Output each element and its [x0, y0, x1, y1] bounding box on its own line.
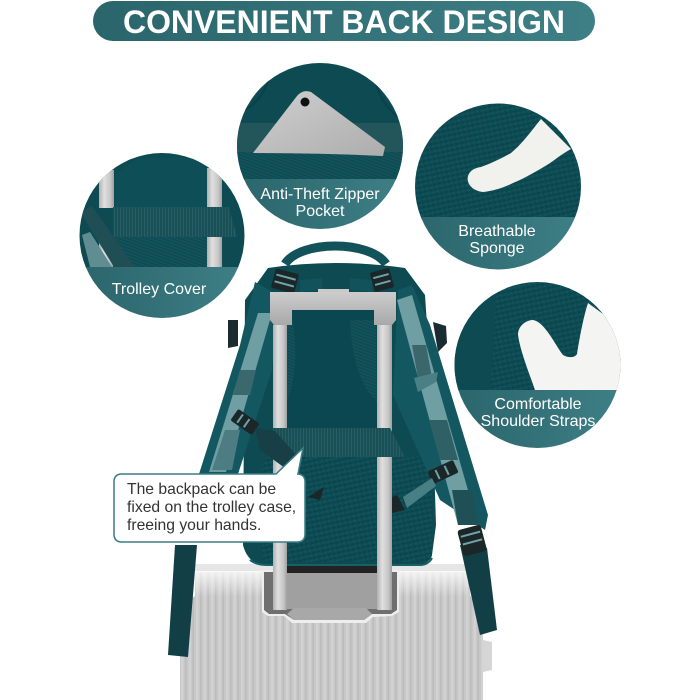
- callout: [114, 448, 305, 542]
- backpack: [168, 246, 497, 657]
- strap to side clip: [403, 478, 436, 508]
- callout: The backpack can be: [127, 481, 276, 498]
- label: trolley cover: Trolley Cover: [112, 281, 207, 298]
- callout: fixed on the trolley case,: [127, 499, 296, 516]
- lower left strap: [168, 545, 197, 657]
- panel: trolley cover: [79, 152, 245, 319]
- label: breathable sponge: Breathable: [458, 223, 536, 240]
- trolley strap: [255, 428, 405, 468]
- panel: breathable sponge: [414, 103, 582, 271]
- buckles: [230, 268, 487, 557]
- right shoulder strap: [393, 285, 488, 530]
- label: comfortable shoulder straps: Comfortable: [494, 396, 582, 413]
- label: anti-theft zipper pocket: [260, 188, 380, 216]
- telescopic trolley handle: [270, 289, 396, 610]
- label: anti-theft zipper pocket: Anti-Theft Zipper: [260, 186, 380, 203]
- top carry handle: [285, 246, 386, 264]
- panel: comfortable shoulder straps: [454, 281, 625, 450]
- label: comfortable shoulder straps: [481, 396, 595, 430]
- label: anti-theft zipper pocket: Pocket: [296, 203, 345, 220]
- panel: anti-theft zipper pocket: [236, 62, 404, 230]
- backpack body: [243, 263, 436, 566]
- callout: freeing your hands.: [127, 517, 261, 534]
- padding cross-section: [518, 303, 625, 390]
- icon: tablet in pocket: [253, 91, 385, 156]
- title banner: CONVENIENT BACK DESIGN: [123, 4, 565, 40]
- label: breathable sponge: Sponge: [469, 240, 525, 257]
- lower right strap: [460, 545, 497, 635]
- sponge cross-section: [468, 119, 571, 192]
- trolley suitcase: [180, 564, 492, 700]
- label: comfortable shoulder straps: Shoulder Straps: [481, 413, 595, 430]
- label: breathable sponge: [458, 223, 536, 257]
- side clips: [228, 320, 238, 348]
- left shoulder strap: [199, 282, 278, 474]
- back panel: [262, 457, 432, 562]
